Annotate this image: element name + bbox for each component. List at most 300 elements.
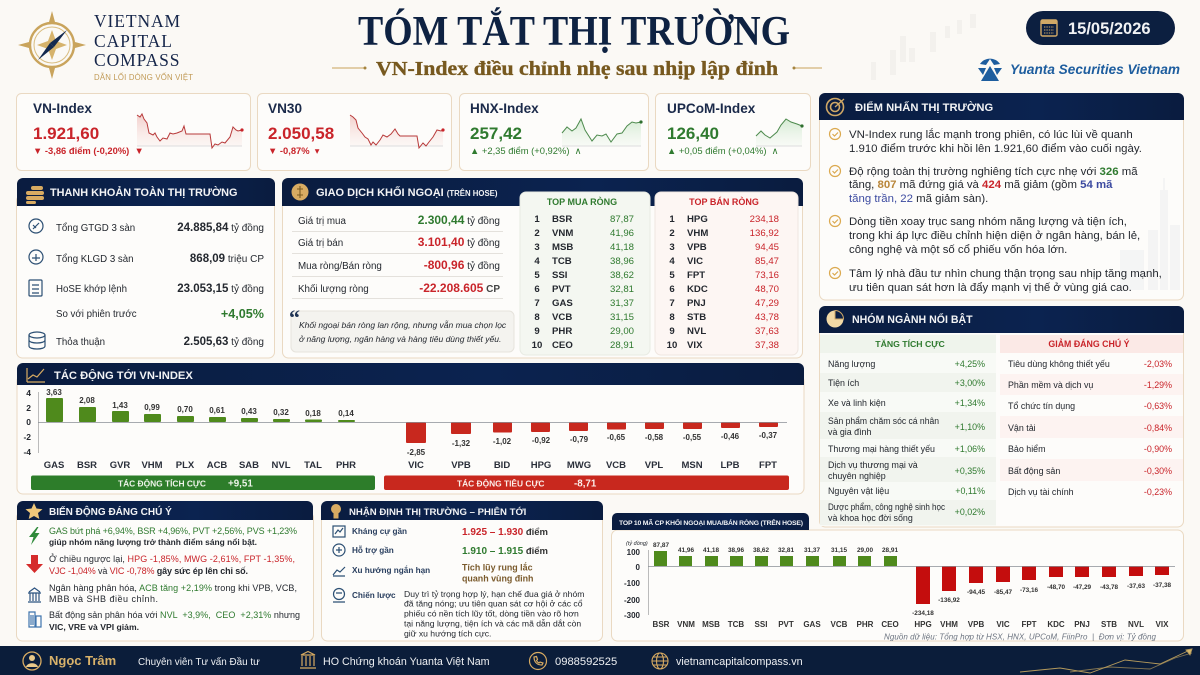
column: sectors up: Thương mại hàng thiết yếu bbox=[828, 444, 935, 454]
advisor role: Chuyên viên Tư vấn Đầu tư bbox=[138, 657, 260, 668]
highlight 1 bbox=[830, 128, 1142, 155]
highlight 2: Độ rộng toàn thị trường nghiêng tích cực nhẹ với 326 mã bbox=[849, 166, 1138, 178]
panel: VN30 card: ▼ -0,87% ▾ bbox=[268, 145, 320, 156]
row: support: Hỗ trợ gần bbox=[352, 545, 394, 555]
foreign values: Giá trị bán bbox=[298, 238, 343, 249]
panel: UPCoM-Index card bbox=[656, 94, 810, 170]
bar chart: top foreign trades: VPB bbox=[968, 620, 984, 629]
brand name: COMPASS bbox=[94, 50, 180, 70]
table: top net buy: 1 bbox=[534, 214, 540, 225]
summary bar: positive impact: +9,51 bbox=[228, 478, 253, 490]
panel: VN30 card: VN30 bbox=[268, 101, 302, 116]
table: top net buy: PVT bbox=[552, 284, 571, 295]
title: TÓM TẮT THỊ TRƯỜNG bbox=[358, 7, 790, 55]
table: top net buy: VCB bbox=[552, 312, 572, 323]
date badge bbox=[1026, 11, 1175, 45]
summary bar: negative impact: TÁC ĐỘNG TIÊU CỰC bbox=[457, 478, 544, 488]
bar chart: index impact: -0,65 bbox=[607, 433, 626, 442]
highlight 3: công nghệ và một số cổ phiếu vốn hóa lớn. bbox=[849, 244, 1067, 256]
table: top net buy: BSR bbox=[552, 214, 572, 225]
head office: HO Chứng khoán Yuanta Việt Nam bbox=[323, 656, 490, 668]
row: put-through: 2.505,63 tỷ đồng bbox=[184, 336, 264, 348]
bar chart: index impact: GVR bbox=[110, 460, 130, 471]
bar chart: index impact: VCB bbox=[606, 460, 626, 471]
panel: VN-Index card: 1.921,60 bbox=[33, 124, 99, 143]
bar chart: index impact: -0,92 bbox=[532, 436, 551, 445]
header: BIẾN ĐỘNG ĐÁNG CHÚ Ý bbox=[49, 505, 172, 518]
table: top net buy: 41,18 bbox=[610, 242, 634, 253]
header bbox=[282, 178, 803, 206]
header: NHẬN ĐỊNH THỊ TRƯỜNG – PHIÊN TỚI bbox=[349, 506, 527, 518]
highlight 3: Dòng tiền xoay trục sang nhóm năng lượng và tiện ích, bbox=[849, 216, 1127, 228]
bar chart: top foreign trades: 41,18 bbox=[703, 547, 719, 554]
item: decliners: Ở chiều ngược lại, HPG -1,85%, MWG -2,61%, FPT -1,35%, bbox=[49, 553, 295, 564]
bar chart: top foreign trades: 100 bbox=[627, 548, 641, 557]
table: top net sell: VIC bbox=[687, 256, 703, 267]
bar chart: top foreign trades: -234,18 bbox=[912, 610, 934, 617]
panel: VN30 card: 2.050,58 bbox=[268, 124, 334, 143]
row: versus previous session: So với phiên trước bbox=[56, 309, 137, 320]
header tab: TOP 10 MÃ CP KHỐI NGOẠI MUA/BÁN RÒNG (TRÊN HOSE) bbox=[619, 517, 803, 527]
table: top net sell: 73,16 bbox=[755, 270, 779, 281]
bar chart: index impact: FPT bbox=[759, 460, 777, 471]
row: total value: Tổng GTGD 3 sàn bbox=[56, 223, 135, 234]
bar chart: top foreign trades: 32,81 bbox=[778, 547, 794, 554]
table: top net buy: 5 bbox=[534, 270, 540, 281]
bar chart: top foreign trades: 31,37 bbox=[804, 547, 820, 554]
sparkline: UPCoM-Index bbox=[756, 119, 804, 146]
brand name: VIETNAM bbox=[94, 11, 181, 31]
table: top net buy: 29,00 bbox=[610, 326, 634, 337]
bar chart: index impact: HPG bbox=[531, 460, 551, 471]
bar chart: index impact: -2 bbox=[23, 432, 31, 442]
bar chart: top foreign trades: 41,96 bbox=[678, 547, 694, 554]
column: sectors up: Sản phẩm chăm sóc cá nhân bbox=[828, 416, 939, 426]
column: sectors up: Nguyên vật liệu bbox=[828, 486, 889, 496]
row: support: 1.910 – 1.915 điểm bbox=[462, 546, 548, 557]
table: top net buy: 7 bbox=[534, 298, 540, 309]
panel: UPCoM-Index card: 126,40 bbox=[667, 124, 719, 143]
table: top net sell: 3 bbox=[669, 242, 675, 253]
column: sectors down: -0,84% bbox=[1144, 423, 1172, 433]
phone number: 0988592525 bbox=[555, 656, 617, 668]
bar chart: top foreign trades: SSI bbox=[755, 620, 767, 629]
column: sectors down: -2,03% bbox=[1144, 359, 1172, 369]
bar chart: index impact: PLX bbox=[176, 460, 195, 471]
table: top net buy: 2 bbox=[534, 228, 540, 239]
table: top net sell: 1 bbox=[669, 214, 675, 225]
bar chart: top foreign trades: 31,15 bbox=[831, 547, 847, 554]
column: sectors up: +0,02% bbox=[955, 507, 985, 517]
column: sectors up: +3,00% bbox=[955, 378, 985, 388]
icon: compass bbox=[18, 11, 86, 79]
summary bar: positive impact bbox=[31, 476, 375, 490]
logo: Vietnam Capital Compass bbox=[18, 11, 193, 82]
foreign values: Mua ròng/Bán ròng bbox=[298, 261, 382, 272]
row: total value bbox=[29, 219, 264, 234]
table: top net sell: 94,45 bbox=[755, 242, 779, 253]
bar chart: index impact: 0,70 bbox=[177, 405, 193, 414]
bar chart: top foreign trades: 38,96 bbox=[728, 547, 744, 554]
row: resistance bbox=[333, 526, 548, 538]
column: sectors down: Tiêu dùng không thiết yếu bbox=[1008, 359, 1110, 369]
table: top net sell: PNJ bbox=[687, 298, 706, 309]
footer decoration: trend lines bbox=[1020, 649, 1192, 673]
logo: Yuanta Securities Vietnam bbox=[978, 59, 1180, 81]
table: top net buy: 31,37 bbox=[610, 298, 634, 309]
table: top net sell: 6 bbox=[669, 284, 675, 295]
table: top net buy: 31,15 bbox=[610, 312, 634, 323]
item: decliners: VJC -1,04% và VIC -0,78% gây sức ép lên chỉ số. bbox=[49, 566, 248, 576]
foreign values: -22.208.605 CP bbox=[419, 281, 500, 295]
website: vietnamcapitalcompass.vn bbox=[676, 656, 803, 668]
column: sectors up: và khoa học đời sống bbox=[828, 513, 913, 523]
table: top net buy: 10 bbox=[532, 340, 542, 351]
bar chart: index impact: 0,43 bbox=[241, 407, 257, 416]
column: sectors down: Phần mềm và dịch vụ bbox=[1008, 380, 1093, 390]
bar chart: index impact: -0,46 bbox=[721, 432, 740, 441]
panel: market liquidity bbox=[16, 178, 275, 358]
bar chart: index impact: 0,99 bbox=[144, 403, 160, 412]
bar chart: index impact: NVL bbox=[272, 460, 291, 471]
column: sectors up: Tiện ích bbox=[828, 378, 859, 388]
bar chart: top foreign trades: -37,63 bbox=[1127, 583, 1146, 590]
sparkline: VN30 bbox=[350, 115, 445, 148]
bar chart: top foreign trades: HPG bbox=[914, 620, 932, 629]
bar chart: index impact: TAL bbox=[304, 460, 322, 471]
row: versus previous session: +4,05% bbox=[221, 307, 264, 321]
bar chart: top foreign trades: STB bbox=[1101, 620, 1117, 629]
table: top net sell: VPB bbox=[687, 242, 707, 253]
column: sectors down: Bảo hiểm bbox=[1008, 444, 1046, 454]
item: banks bbox=[28, 583, 297, 604]
header bbox=[17, 363, 804, 385]
row: strategy bbox=[333, 588, 584, 638]
column: sectors up: chuyên nghiệp bbox=[828, 471, 886, 481]
table: top net sell: 47,29 bbox=[755, 298, 779, 309]
table: top net sell: VHM bbox=[687, 228, 708, 239]
table: top net buy: 87,87 bbox=[610, 214, 634, 225]
bar chart: top foreign trades: 38,62 bbox=[753, 547, 769, 554]
callout bbox=[289, 305, 514, 352]
row: short-term trend: Xu hướng ngắn hạn bbox=[352, 564, 430, 575]
bar chart: index impact: BID bbox=[494, 460, 510, 471]
panel: VN30 card bbox=[258, 94, 452, 170]
panel: VN-Index card bbox=[16, 94, 250, 170]
bar chart: top foreign trades: VCB bbox=[831, 620, 848, 629]
icon: calendar bbox=[1041, 20, 1057, 36]
row: strategy: giữ xu hướng tích cực. bbox=[404, 628, 491, 638]
column: sectors down: -1,29% bbox=[1144, 380, 1172, 390]
bar chart: index impact: 3,63 bbox=[46, 388, 62, 397]
header tab bbox=[612, 513, 809, 530]
bar chart: index impact: VPB bbox=[451, 460, 471, 471]
table: top net buy: 6 bbox=[534, 284, 540, 295]
column: sectors up: Dịch vụ thương mại và bbox=[828, 460, 918, 470]
column: sectors down: -0,23% bbox=[1144, 487, 1172, 497]
panel: notable moves bbox=[16, 501, 314, 641]
icon: coin bbox=[292, 184, 308, 200]
icon: advisor bbox=[23, 652, 41, 670]
bar chart: index impact: VPL bbox=[645, 460, 663, 471]
column: sectors down: Tổ chức tín dụng bbox=[1008, 401, 1075, 411]
bar chart: top foreign trades: -37,38 bbox=[1153, 582, 1172, 589]
column: sectors up: +1,06% bbox=[955, 444, 985, 454]
table: top net sell: 5 bbox=[669, 270, 675, 281]
item: energy: giúp nhóm năng lượng trở thành điểm sáng nổi bật. bbox=[49, 537, 257, 547]
summary bar: negative impact: -8,71 bbox=[574, 478, 597, 490]
subtitle: VN-Index điều chỉnh nhẹ sau nhịp lập đỉnh bbox=[376, 59, 778, 80]
column: sectors up: Năng lượng bbox=[828, 359, 875, 369]
table: top net buy: GAS bbox=[552, 298, 573, 309]
bar chart: top foreign trades: 0 bbox=[636, 563, 641, 572]
bar chart: index impact: 0,32 bbox=[273, 408, 289, 417]
item: real estate: VIC, VRE và VPI giảm. bbox=[49, 622, 139, 632]
table: top net buy: 4 bbox=[534, 256, 540, 267]
bar chart: top foreign trades: BSR bbox=[653, 620, 670, 629]
table: top net sell: 2 bbox=[669, 228, 675, 239]
table: top net sell: 136,92 bbox=[750, 228, 779, 239]
brand name: DẪN LỐI DÒNG VỐN VIỆT bbox=[94, 72, 193, 82]
icon: coins bbox=[26, 186, 44, 204]
row: HoSE matched: 23.053,15 tỷ đồng bbox=[177, 283, 264, 295]
highlight 3 bbox=[830, 216, 1140, 256]
bar chart: index impact: -0,79 bbox=[570, 435, 589, 444]
header bbox=[321, 501, 603, 520]
item: banks: MBB và SHB điều chỉnh. bbox=[49, 594, 158, 604]
advisor name: Ngọc Trâm bbox=[49, 653, 116, 668]
table: top net sell: 9 bbox=[669, 326, 675, 337]
table: top net sell: TOP BÁN RÒNG bbox=[689, 196, 759, 207]
table: top net buy: TOP MUA RÒNG bbox=[547, 196, 617, 207]
bar chart: top foreign trades: NVL bbox=[1128, 620, 1144, 629]
item: energy bbox=[29, 526, 297, 547]
bar chart: index impact: 2 bbox=[26, 403, 31, 413]
icon: Yuanta mark bbox=[978, 59, 1002, 81]
row: strategy: đã tăng nóng; ưu tiên quan sát cơ hội ở các cổ bbox=[404, 598, 583, 608]
bar chart: index impact: 0,18 bbox=[305, 409, 321, 418]
bar chart: top foreign trades: -47,29 bbox=[1073, 584, 1092, 591]
icon: target bbox=[826, 98, 844, 116]
table: top net sell: STB bbox=[687, 312, 706, 323]
row: total volume: 868,09 triệu CP bbox=[190, 253, 264, 265]
table: top net sell: NVL bbox=[687, 326, 706, 337]
bar chart: index impact: MWG bbox=[567, 460, 591, 471]
foreign values: -800,96 tỷ đồng bbox=[424, 258, 500, 272]
table: top net sell: 48,70 bbox=[755, 284, 779, 295]
bar chart: index impact: SAB bbox=[239, 460, 259, 471]
table: top net sell: KDC bbox=[687, 284, 708, 295]
bar chart: top foreign trades: PHR bbox=[857, 620, 874, 629]
callout: “ bbox=[289, 305, 300, 330]
column: sectors up: TĂNG TÍCH CỰC bbox=[875, 339, 945, 349]
header: NHÓM NGÀNH NỔI BẬT bbox=[852, 313, 973, 326]
bar chart: index impact: 1,43 bbox=[112, 401, 128, 410]
bar chart: top foreign trades: 87,87 bbox=[653, 542, 669, 549]
bar chart: index impact: PHR bbox=[336, 460, 356, 471]
icon: line chart bbox=[27, 368, 45, 382]
item: energy: GAS bứt phá +6,94%, BSR +4,96%, PVT +2,56%, PVS +1,23% bbox=[49, 526, 297, 536]
source note: Nguồn dữ liệu: Tổng hợp từ HSX, HNX, UPCoM, FiinPro | Đơn vị: Tỷ đồng bbox=[884, 632, 1157, 642]
panel: UPCoM-Index card: UPCoM-Index bbox=[667, 101, 756, 116]
table: top net buy: 8 bbox=[534, 312, 540, 323]
table: top net sell: 43,78 bbox=[755, 312, 779, 323]
callout: Khối ngoại bán ròng lan rộng, nhưng vẫn mua chọn lọc bbox=[299, 320, 507, 330]
panel: featured sectors bbox=[819, 306, 1184, 527]
bar chart: index impact: -1,32 bbox=[452, 439, 471, 448]
bar chart: index impact: -1,02 bbox=[493, 437, 512, 446]
item: real estate: Bất động sản phân hóa với NVL +3,9%, CEO +2,31% nhưng bbox=[49, 610, 300, 620]
table: top net sell: 10 bbox=[667, 340, 677, 351]
column: sectors down: Bất động sản bbox=[1008, 466, 1060, 476]
row: strategy: phiếu có nền tích lũy tốt, dòng tiền vào rõ hơn bbox=[404, 608, 579, 618]
bar chart: top foreign trades bbox=[624, 540, 1175, 629]
row: HoSE matched bbox=[29, 280, 264, 296]
summary bar: positive impact: TÁC ĐỘNG TÍCH CỰC bbox=[118, 478, 206, 488]
table: top net buy: 3 bbox=[534, 242, 540, 253]
panel: top 10 foreign net buy and sell bbox=[612, 513, 1184, 642]
row: versus previous session bbox=[56, 307, 264, 321]
header bbox=[819, 93, 1184, 120]
summary bar: negative impact bbox=[384, 476, 789, 490]
bar chart: top foreign trades: -85,47 bbox=[994, 589, 1013, 596]
row: HoSE matched: HoSE khớp lệnh bbox=[56, 284, 127, 295]
row: short-term trend: Tích lũy rung lắc bbox=[462, 562, 533, 572]
bar chart: index impact: -4 bbox=[23, 447, 31, 457]
bar chart: index impact: -0,58 bbox=[645, 433, 664, 442]
panel: UPCoM-Index card: ▲ +0,05 điểm (+0,04%) ∧ bbox=[667, 145, 779, 156]
column: sectors down: -0,63% bbox=[1144, 401, 1172, 411]
bar chart: top foreign trades: FPT bbox=[1021, 620, 1037, 629]
logo: Yuanta Securities Vietnam: Yuanta Securities Vietnam bbox=[1010, 62, 1180, 77]
row: strategy: Duy trì tỷ trọng hợp lý, hạn chế đua giá ở nhóm bbox=[404, 589, 584, 599]
row: put-through bbox=[29, 332, 264, 349]
column: sectors up: +0,35% bbox=[955, 466, 985, 476]
bar chart: index impact bbox=[23, 388, 787, 471]
foreign values: 3.101,40 tỷ đồng bbox=[418, 235, 500, 249]
bar chart: top foreign trades: VHM bbox=[940, 620, 958, 629]
bar chart: index impact: BSR bbox=[77, 460, 97, 471]
bar chart: top foreign trades: -48,70 bbox=[1047, 584, 1066, 591]
row: resistance: Kháng cự gần bbox=[352, 527, 407, 536]
highlight 1: 1.910 điểm trước khi hồi lên 1.921,60 điểm vào cuối ngày. bbox=[849, 143, 1142, 155]
panel: HNX-Index card bbox=[460, 94, 648, 170]
panel: outlook bbox=[321, 501, 603, 641]
highlight 2: tăng trần, 22 mã giảm sàn). bbox=[849, 193, 988, 205]
item: banks: Ngân hàng phân hóa, ACB tăng +2,19% trong khi VPB, VCB, bbox=[49, 583, 297, 593]
header bbox=[17, 178, 275, 206]
bar chart: top foreign trades: (tỷ đồng) bbox=[626, 540, 648, 547]
foreign values: Giá trị mua bbox=[298, 216, 346, 227]
date badge: 15/05/2026 bbox=[1068, 20, 1151, 38]
column: sectors down: Vận tải bbox=[1008, 423, 1036, 433]
column: sectors up: Dược phẩm, công nghệ sinh học bbox=[828, 502, 946, 512]
table: top net buy: 28,91 bbox=[610, 340, 634, 351]
bar chart: index impact: ACB bbox=[207, 460, 227, 471]
row: strategy: Chiến lược bbox=[352, 591, 396, 600]
row: short-term trend: quanh vùng đỉnh bbox=[462, 574, 533, 584]
row: short-term trend bbox=[333, 562, 533, 584]
header: ĐIỂM NHẤN THỊ TRƯỜNG bbox=[855, 101, 993, 114]
table: top net buy: PHR bbox=[552, 326, 572, 337]
table: top net sell: VIX bbox=[687, 340, 703, 351]
table: top net buy: MSB bbox=[552, 242, 573, 253]
highlight 1: VN-Index rung lắc mạnh trong phiên, có lúc lùi về quanh bbox=[849, 128, 1133, 141]
table: top net sell: 37,38 bbox=[755, 340, 779, 351]
bar chart: top foreign trades: PVT bbox=[778, 620, 794, 629]
bar chart: top foreign trades: -43,78 bbox=[1100, 584, 1119, 591]
column: sectors up: +4,25% bbox=[955, 359, 985, 369]
icon: light bulb bbox=[331, 504, 341, 518]
bar chart: top foreign trades: -136,92 bbox=[938, 597, 960, 604]
item: real estate bbox=[29, 610, 300, 632]
header: GIAO DỊCH KHỐI NGOẠI (TRÊN HOSE) bbox=[316, 185, 498, 199]
row: total volume: Tổng KLGD 3 sàn bbox=[56, 254, 134, 265]
bar chart: index impact: -0,55 bbox=[683, 433, 702, 442]
panel: HNX-Index card: ▲ +2,35 điểm (+0,92%) ∧ bbox=[470, 145, 582, 156]
bar chart: top foreign trades: 28,91 bbox=[882, 547, 898, 554]
table: top net sell: 234,18 bbox=[750, 214, 779, 225]
callout: ở năng lượng, ngân hàng và hàng tiêu dùng thiết yếu. bbox=[299, 334, 501, 344]
panel: HNX-Index card: 257,42 bbox=[470, 124, 522, 143]
row: total value: 24.885,84 tỷ đồng bbox=[177, 222, 264, 234]
table: top net sell: FPT bbox=[687, 270, 705, 281]
brand name: CAPITAL bbox=[94, 31, 173, 51]
column: sectors up: và gia đình bbox=[828, 427, 871, 437]
highlight 4 bbox=[830, 268, 1162, 294]
panel: foreign trading bbox=[282, 178, 803, 358]
table: top net buy: 38,96 bbox=[610, 256, 634, 267]
row: strategy: tại năng lượng, tiện ích và các mã dẫn dắt còn bbox=[404, 618, 581, 628]
foreign values: 2.300,44 tỷ đồng bbox=[418, 213, 500, 227]
bar chart: top foreign trades: -73,16 bbox=[1020, 587, 1039, 594]
bar chart: index impact: 2,08 bbox=[79, 396, 95, 405]
sparkline: HNX-Index bbox=[562, 119, 643, 146]
icon: star bbox=[26, 503, 42, 519]
panel: market highlights bbox=[819, 93, 1184, 300]
table: top net sell: 4 bbox=[669, 256, 675, 267]
column: sectors up: +0,11% bbox=[955, 486, 985, 496]
bar chart: index impact: GAS bbox=[44, 460, 64, 471]
bar chart: index impact: 0,61 bbox=[209, 406, 225, 415]
table: top net buy: 41,96 bbox=[610, 228, 634, 239]
table: top net buy: 32,81 bbox=[610, 284, 634, 295]
bar chart: top foreign trades: KDC bbox=[1047, 620, 1065, 629]
highlight 2: tăng, 807 mã đứng giá và 424 mã giảm (gồm 54 mã bbox=[849, 179, 1113, 191]
highlight 2 bbox=[830, 166, 1138, 205]
row: total volume bbox=[29, 250, 264, 265]
header: THANH KHOẢN TOÀN THỊ TRƯỜNG bbox=[50, 186, 238, 199]
brand name bbox=[94, 11, 193, 82]
bar chart: top foreign trades: VIX bbox=[1156, 620, 1169, 629]
bar chart: top foreign trades: MSB bbox=[702, 620, 720, 629]
highlight 4: Tâm lý nhà đầu tư nhìn chung thận trọng sau nhịp tăng mạnh, bbox=[849, 268, 1162, 280]
highlight 4: ưu tiên quan sát hơn là đẩy mạnh vị thế ở vùng giá cao. bbox=[849, 282, 1132, 294]
bar chart: top foreign trades: GAS bbox=[803, 620, 821, 629]
column: sectors down bbox=[1000, 335, 1183, 497]
header bbox=[819, 306, 1184, 333]
column: sectors up: +1,34% bbox=[955, 398, 985, 408]
bar chart: top foreign trades: -100 bbox=[624, 579, 641, 588]
column: sectors down: GIẢM ĐÁNG CHÚ Ý bbox=[1048, 338, 1130, 349]
panel: VN-Index card: VN-Index bbox=[33, 101, 92, 116]
icon: head office bbox=[300, 652, 316, 668]
bar chart: top foreign trades: VNM bbox=[677, 620, 695, 629]
bar chart: index impact: -0,37 bbox=[759, 431, 778, 440]
bar chart: top foreign trades: CEO bbox=[881, 620, 899, 629]
header: TÁC ĐỘNG TỚI VN-INDEX bbox=[54, 369, 193, 382]
table: top net sell: 85,47 bbox=[755, 256, 779, 267]
